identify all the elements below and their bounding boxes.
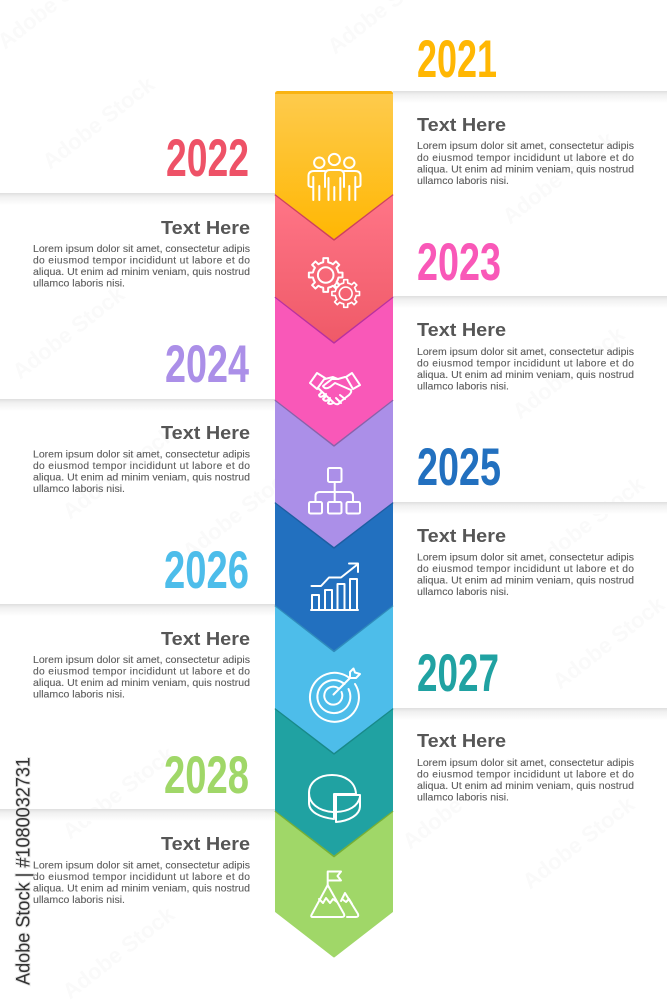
text block 2025: ullamco laboris nisi.	[417, 587, 509, 598]
text block 2025: Lorem ipsum dolor sit amet, consectetur adipis	[417, 552, 634, 564]
icon: target	[310, 668, 360, 722]
text block 2026: Text Here	[161, 628, 250, 649]
background watermark: Adobe Stock	[548, 591, 667, 694]
background watermark: Adobe Stock	[398, 751, 520, 854]
year 2028: 2028	[164, 746, 249, 805]
text block 2027	[417, 730, 634, 804]
text block 2021: aliqua. Ut enim ad minim veniam, quis nostrud	[417, 164, 634, 176]
year 2022: 2022	[166, 129, 249, 188]
year 2026: 2026	[164, 541, 249, 600]
background watermark: Adobe Stock	[528, 471, 650, 574]
icon: growth chart	[311, 564, 358, 610]
text block 2027: do eiusmod tempor incididunt ut labore et do	[417, 770, 634, 780]
shelf shadows	[0, 91, 667, 821]
background watermark: Adobe Stock	[498, 126, 620, 229]
text block 2027: Lorem ipsum dolor sit amet, consectetur adipis	[417, 758, 634, 769]
segment 2021 yellow	[275, 91, 393, 240]
segment 2028 green	[276, 800, 392, 956]
icon: handshake	[310, 373, 360, 404]
text block 2023: ullamco laboris nisi.	[417, 382, 509, 392]
segment 2023 pink	[275, 290, 393, 446]
text block 2024: aliqua. Ut enim ad minim veniam, quis nostrud	[33, 472, 250, 484]
icon: mountain with flag	[311, 872, 358, 917]
text block 2023: Lorem ipsum dolor sit amet, consectetur adipis	[417, 347, 634, 358]
text block 2026: ullamco laboris nisi.	[33, 690, 125, 700]
text block 2026: aliqua. Ut enim ad minim veniam, quis nostrud	[33, 678, 250, 689]
text block 2022	[33, 217, 250, 290]
text block 2027: Text Here	[417, 730, 506, 751]
central chevron ribbon	[275, 91, 393, 956]
year 2021: 2021	[417, 30, 497, 89]
text block 2024: do eiusmod tempor incididunt ut labore et do	[33, 461, 250, 472]
icon: pie chart	[309, 775, 360, 822]
text block 2028: ullamco laboris nisi.	[33, 895, 125, 906]
text block 2024: Text Here	[161, 422, 250, 443]
text block 2024: ullamco laboris nisi.	[33, 484, 125, 495]
year 2027: 2027	[417, 644, 499, 703]
icon: team of people	[308, 154, 360, 200]
text block 2028: Lorem ipsum dolor sit amet, consectetur adipis	[33, 860, 250, 872]
text block 2025: Text Here	[417, 525, 506, 546]
text block 2026: do eiusmod tempor incididunt ut labore et do	[33, 666, 250, 678]
background watermark: Adobe Stock	[8, 281, 130, 384]
segment 2022 red	[275, 190, 393, 343]
segment 2027 teal	[275, 700, 393, 856]
text block 2022: do eiusmod tempor incididunt ut labore et do	[33, 256, 250, 266]
text block 2026: Lorem ipsum dolor sit amet, consectetur adipis	[33, 655, 250, 666]
text block 2023: do eiusmod tempor incididunt ut labore et do	[417, 358, 634, 370]
segment 2024 purple	[275, 395, 393, 548]
text block 2022: ullamco laboris nisi.	[33, 278, 125, 290]
background watermark: Adobe Stock	[178, 461, 300, 564]
text block 2021: Text Here	[417, 114, 506, 135]
text block 2022: Lorem ipsum dolor sit amet, consectetur adipis	[33, 244, 250, 255]
segment 2026 cyan	[275, 600, 393, 754]
text block 2025	[417, 525, 634, 598]
text block 2022: aliqua. Ut enim ad minim veniam, quis nostrud	[33, 267, 250, 278]
text block 2023: Text Here	[417, 319, 506, 340]
text block 2024	[33, 422, 250, 495]
text block 2028: Text Here	[161, 833, 250, 854]
text block 2025: do eiusmod tempor incididunt ut labore et do	[417, 564, 634, 575]
text block 2023: aliqua. Ut enim ad minim veniam, quis nostrud	[417, 370, 634, 381]
background watermark: Adobe Stock	[38, 71, 160, 174]
background watermark: Adobe Stock	[58, 421, 180, 524]
year 2025: 2025	[417, 438, 501, 497]
text block 2021: do eiusmod tempor incididunt ut labore et do	[417, 153, 634, 164]
text block 2021: Lorem ipsum dolor sit amet, consectetur adipis	[417, 141, 634, 152]
text block 2027: aliqua. Ut enim ad minim veniam, quis nostrud	[417, 781, 634, 792]
text block 2027: ullamco laboris nisi.	[417, 792, 509, 804]
icon: org chart	[309, 468, 360, 514]
text block 2021	[417, 114, 634, 187]
stock credit: Adobe Stock | #1080032731	[14, 757, 34, 985]
icon: gears	[309, 258, 360, 307]
text block 2028: do eiusmod tempor incididunt ut labore et do	[33, 872, 250, 883]
year 2024: 2024	[165, 335, 249, 394]
background watermark: Adobe Stock	[58, 741, 180, 844]
text block 2023	[417, 319, 634, 392]
text block 2024: Lorem ipsum dolor sit amet, consectetur adipis	[33, 450, 250, 460]
background watermark: Adobe Stock	[518, 791, 640, 894]
segment 2025 blue	[275, 495, 393, 651]
background watermark: Adobe Stock	[508, 321, 630, 424]
text block 2026	[33, 628, 250, 700]
text block 2021: ullamco laboris nisi.	[417, 176, 509, 187]
text block 2022: Text Here	[161, 217, 250, 238]
text block 2025: aliqua. Ut enim ad minim veniam, quis nostrud	[417, 576, 634, 586]
text block 2028	[33, 833, 250, 906]
text block 2028: aliqua. Ut enim ad minim veniam, quis nostrud	[33, 884, 250, 894]
year 2023: 2023	[417, 233, 501, 292]
